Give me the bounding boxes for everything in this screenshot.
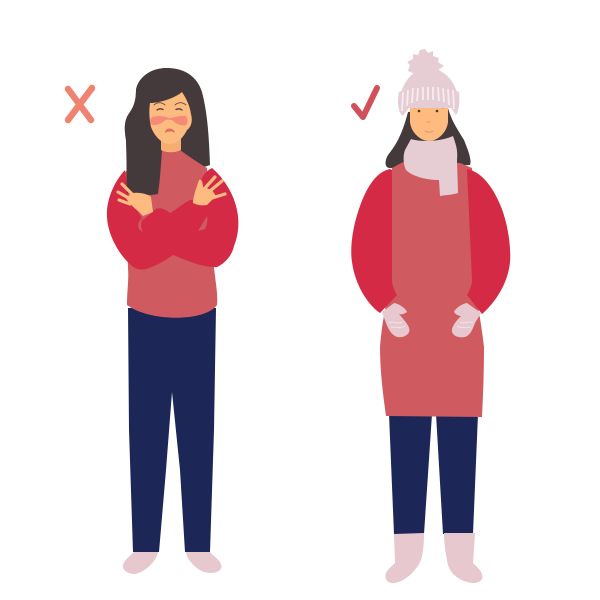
trousers [389,414,478,534]
flushed cheeks [150,116,187,126]
icon: check mark [354,88,377,117]
hair front [125,68,175,195]
hair [386,108,471,168]
hat crown [400,68,458,108]
frowning mouth [165,128,175,133]
right sleeve [467,169,510,314]
hair back [125,68,210,193]
boots [385,533,483,583]
hat brim ribs [402,87,454,111]
nose and mouth [425,122,433,132]
scarf [404,136,458,196]
mitten stitching [389,322,473,328]
face [149,92,192,144]
crossed sleeves [107,168,238,270]
eyes and brows [154,103,186,110]
face [410,100,448,141]
icon: wrong cross mark [68,88,92,120]
hat brim [398,86,459,116]
left sleeve [351,169,397,313]
right mitten [452,303,481,337]
figure: warmly dressed woman [351,49,510,583]
right hand [193,177,225,205]
left mitten [382,303,410,337]
sleeve folds [138,216,207,232]
figure: underdressed woman shivering [107,68,238,574]
neck [161,135,181,152]
trousers [128,308,216,552]
eyes and brows [414,106,443,112]
sweater torso [125,150,217,318]
coat dress [380,162,484,417]
left hand [118,184,153,216]
bare feet [123,552,222,574]
pompom [407,49,444,76]
